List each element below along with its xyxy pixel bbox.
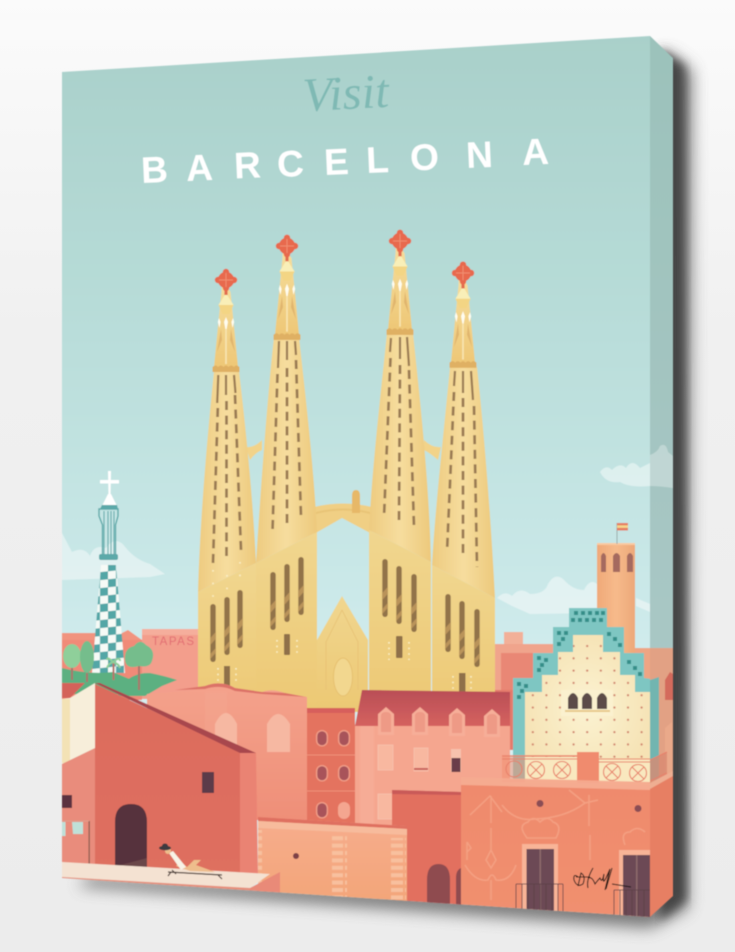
canvas drop shadow: [78, 48, 692, 928]
clouds: [62, 463, 650, 614]
rooftop terrace: [62, 862, 280, 893]
windows: [378, 745, 461, 819]
connecting bridge: [314, 504, 372, 534]
balcony railing: [461, 752, 650, 788]
arched windows: [565, 693, 610, 712]
washing line: [62, 821, 90, 873]
large red house: [95, 683, 258, 875]
cross: [100, 471, 119, 506]
tower 3: [369, 230, 431, 720]
arched door: [115, 804, 147, 867]
tower 2: [256, 235, 317, 720]
cathedral: Sagrada Familia: [198, 230, 495, 720]
narrow red building: [307, 708, 355, 826]
roof edge: [95, 683, 256, 753]
flag tower: [597, 523, 635, 653]
trees and garden: [62, 641, 177, 696]
vent holes: [536, 800, 544, 807]
mid pink building: [147, 683, 307, 820]
checker shaft: [92, 565, 125, 673]
pink apartment building: [355, 690, 510, 826]
flag: [616, 523, 628, 544]
signature: [574, 868, 631, 890]
coral ornate building: [461, 778, 650, 920]
vent hole: [293, 853, 299, 859]
poster front face: [62, 36, 660, 920]
title: BARCELONA: BARCELONA: [140, 131, 550, 191]
window: [202, 772, 214, 793]
sunbather on lounger: [159, 844, 222, 879]
terracotta brick building: [258, 817, 407, 905]
dormers: [378, 707, 394, 735]
canvas wrapped side edge: [650, 36, 673, 920]
Gaudi stepped house: [513, 608, 660, 785]
red door building: [392, 790, 461, 915]
balcony door right: [614, 850, 650, 920]
poster artwork: [62, 36, 673, 920]
side arches: [246, 440, 262, 460]
gable: [317, 596, 368, 712]
tower 4: [432, 261, 495, 720]
cream wall with dots: [524, 634, 651, 759]
sky: [62, 36, 650, 917]
background rooftops left: [62, 629, 198, 700]
mosaic tiles: [517, 611, 642, 699]
left cream wall and side wall: [62, 683, 95, 865]
lantern: [99, 505, 118, 560]
background rooftops right: [490, 632, 652, 758]
sgraffito ornaments: [465, 790, 645, 900]
tapas sign: TAPAS: [152, 636, 196, 648]
teal stepped gable: [513, 608, 660, 780]
title: Visit: Visit: [301, 65, 392, 122]
tower 1: [198, 269, 256, 720]
Gaudi mosaic tower: [92, 471, 125, 673]
balcony door left: [516, 844, 563, 914]
